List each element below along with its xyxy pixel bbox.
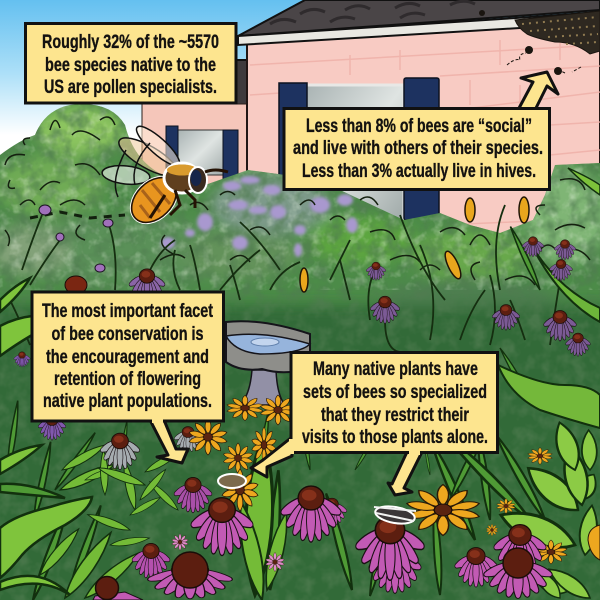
callout: bee conservation: native plant populations. <box>43 391 212 412</box>
callout: pollen specialists: US are pollen specialists. <box>44 77 217 98</box>
small bee on flower <box>218 474 246 488</box>
callout: pollen specialists: Roughly 32% of the ~5570 <box>42 32 219 53</box>
white sky band behind bush <box>0 135 200 175</box>
callout: specialized bees: sets of bees so specialized <box>303 382 487 403</box>
roof <box>238 0 600 36</box>
right ferny leaves <box>496 419 600 600</box>
callout: pollen specialists: bee species native to the <box>45 55 216 76</box>
siding lines <box>250 40 600 225</box>
callout: specialized bees: that they restrict their <box>321 405 469 426</box>
tall grass and stems <box>10 205 560 352</box>
bee legs and antenna <box>150 170 228 218</box>
callout: bee conservation: the encouragement and <box>46 347 209 368</box>
bee body <box>123 169 185 231</box>
arrow to swarm <box>518 72 558 110</box>
bee swarm <box>479 10 600 75</box>
bee thorax <box>164 163 200 193</box>
magenta coneflowers <box>93 477 554 600</box>
red flower head <box>65 276 87 294</box>
small grey coneflower <box>174 427 202 452</box>
callout: specialized bees <box>251 352 498 495</box>
house <box>142 0 600 300</box>
callout: social bees <box>284 108 550 190</box>
large leaf right <box>498 365 600 428</box>
callout: bee conservation: of bee conservation is <box>52 324 204 345</box>
big left leaves <box>0 278 92 595</box>
callout: specialized bees: Many native plants have <box>313 359 478 380</box>
black-eyed susans <box>188 395 568 564</box>
partial yellow flower at right edge <box>588 525 600 560</box>
bee head <box>189 167 207 193</box>
callout: pollen specialists <box>26 24 236 103</box>
lavender bush <box>161 176 358 257</box>
bush line squiggles <box>5 117 590 285</box>
dashed bee flight path <box>30 212 125 218</box>
callout: bee conservation: retention of flowering <box>54 369 201 390</box>
bird bath <box>226 321 310 405</box>
top right leaf <box>533 248 600 322</box>
lilac buds <box>39 205 113 272</box>
callout: bee conservation: The most important facet <box>42 301 213 322</box>
specialist bee <box>374 504 416 526</box>
shingles <box>270 1 475 24</box>
grey coneflower <box>100 433 140 470</box>
upper right leaf tip <box>568 168 600 195</box>
main window <box>279 78 439 220</box>
back foliage blades <box>6 225 549 600</box>
callout: specialized bees: visits to those plants alone. <box>302 427 488 448</box>
callout: bee conservation <box>32 292 224 463</box>
main house wall <box>247 14 600 300</box>
honey bee <box>101 121 228 231</box>
fascia <box>238 12 600 45</box>
bee wings <box>101 121 184 197</box>
sky <box>0 0 600 135</box>
yellow buds <box>300 197 529 292</box>
lower house wing <box>142 60 248 194</box>
small purple coneflowers <box>13 237 591 440</box>
bright foliage blades <box>36 435 293 600</box>
